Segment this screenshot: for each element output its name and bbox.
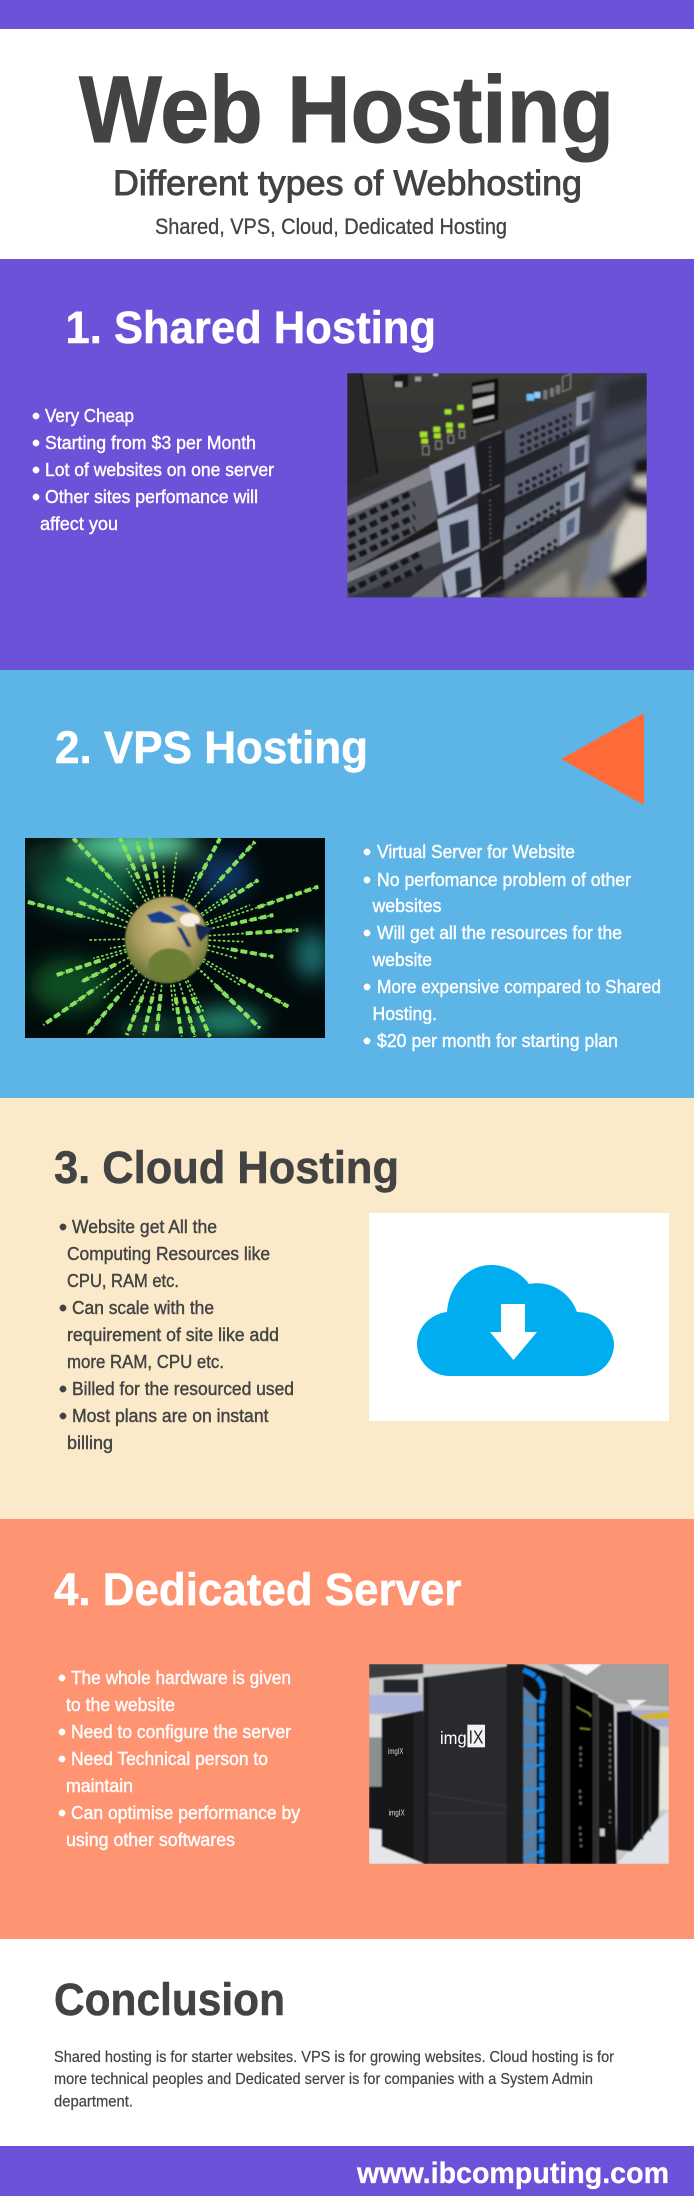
photo: data center racks bbox=[369, 1664, 669, 1864]
photo: data center racks: IX bbox=[469, 1726, 484, 1747]
subtitle: Different types of Webhosting bbox=[113, 164, 582, 203]
conclusion paragraph: department. bbox=[54, 2094, 133, 2110]
conclusion paragraph: Shared hosting is for starter websites. VPS is for growing websites. Cloud hosting is for bbox=[54, 2049, 614, 2066]
list: VPS hosting points: website bbox=[372, 950, 432, 970]
header panel bbox=[0, 29, 694, 259]
main rack bbox=[423, 1664, 523, 1864]
list: cloud hosting points: billing bbox=[67, 1433, 113, 1453]
panel: dedicated server bbox=[0, 1519, 694, 1939]
list: shared hosting points: Lot of websites on one server bbox=[45, 460, 274, 480]
heading: shared hosting: 1. Shared Hosting bbox=[66, 302, 436, 353]
list: VPS hosting points: Hosting. bbox=[372, 1004, 437, 1024]
list: dedicated server points bbox=[59, 1668, 300, 1850]
panel: shared hosting bbox=[0, 259, 694, 670]
list: cloud hosting points: Billed for the resourced used bbox=[72, 1379, 294, 1399]
list: VPS hosting points bbox=[364, 842, 661, 1051]
list: dedicated server points: Need to configure the server bbox=[71, 1722, 291, 1742]
binary rays outer bbox=[27, 838, 318, 1037]
list: dedicated server points: using other softwares bbox=[66, 1830, 235, 1850]
list: shared hosting points: Starting from $3 per Month bbox=[45, 433, 256, 453]
photo: server rack bbox=[347, 373, 650, 600]
list: VPS hosting points: $20 per month for starting plan bbox=[377, 1031, 618, 1051]
tagline: Shared, VPS, Cloud, Dedicated Hosting bbox=[155, 214, 507, 239]
list: VPS hosting points: No perfomance problem of other bbox=[377, 870, 631, 890]
website url: www.ibcomputing.com bbox=[356, 2157, 669, 2190]
list: shared hosting points: affect you bbox=[40, 514, 118, 534]
list: cloud hosting points: Can scale with the bbox=[72, 1298, 214, 1318]
photo: digital globe bbox=[23, 830, 328, 1040]
title: Web Hosting bbox=[79, 57, 614, 163]
heading: conclusion: Conclusion bbox=[54, 1974, 285, 2025]
photo: data center racks: imgIX bbox=[388, 1746, 403, 1756]
list: VPS hosting points: Virtual Server for Website bbox=[377, 842, 575, 862]
list: cloud hosting points: CPU, RAM etc. bbox=[67, 1271, 179, 1291]
list: VPS hosting points: websites bbox=[372, 896, 442, 916]
status LEDs bbox=[420, 405, 464, 444]
earth bbox=[125, 897, 213, 983]
list: cloud hosting points bbox=[60, 1217, 294, 1453]
list: dedicated server points: Need Technical person to bbox=[71, 1749, 268, 1769]
list: cloud hosting points: requirement of site like add bbox=[67, 1325, 279, 1345]
list: dedicated server points: Can optimise performance by bbox=[71, 1803, 300, 1823]
panel: conclusion bbox=[0, 1939, 694, 2146]
left rack bbox=[382, 1711, 423, 1863]
binary rays inner bbox=[27, 838, 318, 1037]
photo: data center racks: imgIX bbox=[389, 1808, 405, 1818]
conclusion paragraph bbox=[54, 2049, 614, 2110]
list: VPS hosting points: Will get all the resources for the bbox=[377, 923, 622, 943]
conclusion paragraph: more technical peoples and Dedicated server is for companies with a System Admin bbox=[54, 2071, 593, 2088]
center rail bbox=[477, 430, 505, 598]
list: VPS hosting points: More expensive compared to Shared bbox=[377, 977, 661, 997]
blue cables bbox=[523, 1670, 543, 1863]
panel: VPS hosting bbox=[0, 670, 694, 1098]
heading: VPS hosting: 2. VPS Hosting bbox=[55, 722, 368, 773]
cabinets bbox=[523, 1664, 563, 1864]
footer band bbox=[0, 2146, 694, 2196]
list: cloud hosting points: Website get All the bbox=[72, 1217, 217, 1237]
list: dedicated server points: to the website bbox=[66, 1695, 175, 1715]
heading: dedicated server: 4. Dedicated Server bbox=[54, 1564, 462, 1615]
list: shared hosting points: Very Cheap bbox=[45, 406, 134, 426]
list: shared hosting points bbox=[33, 406, 274, 534]
list: cloud hosting points: Most plans are on instant bbox=[72, 1406, 268, 1426]
list: cloud hosting points: more RAM, CPU etc. bbox=[67, 1352, 224, 1372]
top purple band bbox=[0, 0, 694, 29]
icon: orange triangle bbox=[561, 713, 644, 805]
icon: cloud download bbox=[369, 1213, 669, 1421]
usb ports bbox=[472, 378, 498, 426]
list: cloud hosting points: Computing Resources like bbox=[67, 1244, 270, 1264]
blurred background of rack bbox=[503, 373, 650, 600]
left server units bbox=[347, 480, 438, 573]
list: shared hosting points: Other sites perfomance will bbox=[45, 487, 258, 507]
heading: cloud hosting: 3. Cloud Hosting bbox=[54, 1142, 399, 1193]
panel: cloud hosting bbox=[0, 1098, 694, 1519]
right server units bbox=[504, 400, 590, 464]
list: dedicated server points: The whole hardware is given bbox=[71, 1668, 291, 1688]
logo text: img bbox=[440, 1728, 467, 1748]
list: dedicated server points: maintain bbox=[66, 1776, 133, 1796]
